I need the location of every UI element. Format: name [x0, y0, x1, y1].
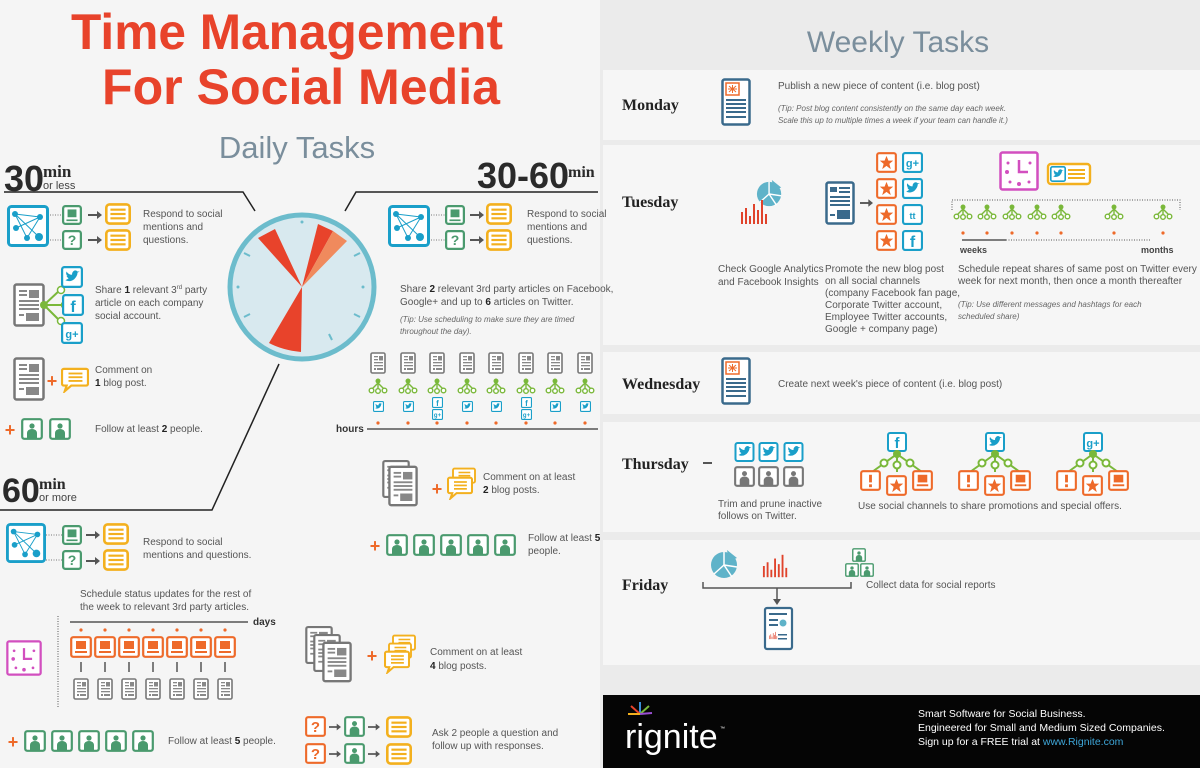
row: tuesday: (company Facebook fan page,	[825, 288, 960, 299]
item: ask 2 people: ?	[311, 719, 320, 736]
item: respond 60	[7, 524, 251, 570]
row: monday: (Tip: Post blog content consistently on the same day each week.	[778, 104, 1006, 113]
row: tuesday: f	[910, 234, 916, 251]
item: share 2 articles: Google+ and up to 6 articles on Twitter.	[400, 297, 574, 308]
item: share 1 article: article on each company	[95, 298, 203, 309]
row: tuesday: Schedule repeat shares of same post on Twitter every	[958, 264, 1197, 275]
item: comment on 2 blog posts: Comment on at least	[483, 472, 575, 483]
item: follow 5 (60)	[8, 731, 276, 752]
item: respond 30-60: Respond to social	[527, 209, 606, 220]
item: respond 30-60: questions.	[527, 235, 573, 246]
title	[71, 4, 503, 115]
chart: hourly timeline: g+	[523, 413, 531, 419]
row: thursday: Trim and prune inactive	[718, 499, 823, 510]
row: tuesday: g+	[906, 158, 919, 170]
background right	[600, 0, 1200, 768]
chart: scheduled status updates days	[7, 589, 276, 707]
row: wednesday: Create next week's piece of content (i.e. blog post)	[778, 379, 1002, 390]
header: 30 min or less: min	[43, 162, 72, 181]
row: thursday: Thursday	[622, 456, 689, 473]
item: follow 2: +	[5, 420, 15, 440]
item: share 1 article: party	[182, 285, 207, 296]
item: follow 2	[5, 419, 203, 440]
header: 60 min or more: or more	[39, 492, 77, 504]
item: comment on 2 blog posts: 2 blog posts.	[483, 485, 540, 496]
row: monday: Monday	[622, 97, 679, 114]
clock	[230, 215, 374, 359]
item: comment on 4 blog posts: Comment on at least	[430, 647, 522, 658]
row: tuesday: months	[1141, 245, 1174, 255]
footer: rignite	[603, 695, 1200, 768]
row: tuesday: weeks	[959, 245, 987, 255]
row: tuesday: and Facebook Insights	[718, 277, 819, 288]
title: Time Management	[71, 4, 503, 60]
title: For Social Media	[102, 59, 501, 115]
row: thursday: Use social channels to share promotions and special offers.	[858, 501, 1122, 512]
item: share 1 article: Share 1 relevant 3	[95, 285, 177, 296]
item: follow 5 (30-60): people.	[528, 546, 561, 557]
header: 30-60 min: 30-60	[477, 155, 569, 196]
item: share 1 article: rd	[177, 285, 182, 291]
row: friday: Friday	[622, 577, 668, 594]
item: respond 30min: questions.	[143, 235, 189, 246]
header: 30 min or less: or less	[43, 180, 76, 192]
item: comment on 2 blog posts: +	[432, 479, 442, 499]
chart: scheduled status updates days: days	[253, 617, 276, 628]
row: tuesday: Tuesday	[622, 194, 678, 211]
row: wednesday: Wednesday	[622, 376, 700, 393]
item: follow 5 (30-60)	[370, 533, 601, 557]
footer: rignite: Engineered for Small and Medium Sized Companies.	[918, 722, 1165, 734]
header: 30-60 min	[345, 155, 598, 211]
row: monday: Scale this up to multiple times a week if your team can handle it.)	[778, 116, 1008, 125]
item: share 1 article: social account.	[95, 311, 161, 322]
item: share 1 article: g+	[65, 329, 79, 341]
row: wednesday	[622, 358, 1002, 404]
header: 30 min or less	[4, 158, 255, 211]
item: ask 2 people	[306, 717, 558, 764]
item: comment on 2 blog posts	[383, 461, 575, 505]
item: comment on 4 blog posts: +	[367, 646, 377, 666]
footer: rignite: rignite	[625, 718, 718, 756]
row: tuesday: on all social channels	[825, 276, 920, 287]
header: 60 min or more: 60	[2, 472, 40, 510]
item: follow 5 (60): +	[8, 732, 18, 752]
item: ask 2 people: Ask 2 people a question and	[432, 728, 558, 739]
item: respond 30min: Respond to social	[143, 209, 222, 220]
item: respond 30min	[8, 204, 222, 250]
item: follow 5 (30-60): Follow at least 5	[528, 533, 601, 544]
row: friday	[622, 549, 996, 649]
header: 60 min or more	[0, 364, 279, 510]
row: tuesday: Employee Twitter accounts,	[825, 312, 947, 323]
item: respond 30min: mentions and	[143, 222, 203, 233]
item: comment on 4 blog posts: 4 blog posts.	[430, 661, 487, 672]
chart: hourly timeline: f	[525, 399, 528, 408]
row: friday: Collect data for social reports	[866, 580, 996, 591]
row: thursday: follows on Twitter.	[718, 511, 797, 522]
item: respond 60: Respond to social	[143, 537, 222, 548]
item: share 2 articles: throughout the day).	[400, 327, 472, 336]
item: share 2 articles: Share 2 relevant 3rd party articles on Facebook,	[400, 284, 613, 295]
item: comment on 1 blog post: +	[47, 371, 57, 391]
item: respond 30-60: mentions and	[527, 222, 587, 233]
row: monday: Publish a new piece of content (i.e. blog post)	[778, 81, 980, 92]
item: comment on 1 blog post	[14, 358, 152, 400]
chart: scheduled status updates days: the week to relevant 3rd party articles.	[80, 602, 249, 613]
footer: rignite: ™	[720, 726, 725, 732]
heading: daily tasks: Daily Tasks	[219, 130, 375, 165]
item: share 2 articles: (Tip: Use scheduling to make sure they are timed	[400, 315, 575, 324]
item: share 2 articles	[400, 284, 613, 336]
row: tuesday: Promote the new blog post	[825, 264, 944, 275]
item: comment on 1 blog post: Comment on	[95, 365, 152, 376]
header: 30 min or less: 30	[4, 158, 44, 199]
item: respond 60: mentions and questions.	[143, 550, 251, 561]
item: ask 2 people: follow up with responses.	[432, 741, 544, 752]
row: thursday: g+	[1086, 438, 1100, 450]
row: monday	[622, 80, 1008, 125]
row: tuesday: Check Google Analytics	[718, 264, 824, 275]
item: follow 5 (60): Follow at least 5 people.	[168, 736, 276, 747]
footer: rignite: Sign up for a FREE trial at www.Rignite.com	[918, 736, 1124, 748]
row: thursday	[622, 433, 1128, 522]
row: tuesday: (Tip: Use different messages and hashtags for each	[958, 300, 1142, 309]
item: respond 30-60	[390, 204, 606, 250]
item: comment on 1 blog post: 1 blog post.	[95, 378, 147, 389]
row: tuesday: tt	[910, 211, 916, 221]
row: tuesday: week for next month, then once a month thereafter	[957, 276, 1183, 287]
chart: hourly timeline: hours	[336, 424, 364, 435]
item: respond 30-60: ?	[451, 232, 459, 248]
item: share 1 article	[14, 267, 207, 343]
row: tuesday	[622, 152, 1197, 335]
row: thursday: f	[894, 435, 900, 452]
header: 30-60 min: min	[568, 164, 595, 181]
item: follow 2: Follow at least 2 people.	[95, 424, 203, 435]
row: tuesday: scheduled share)	[958, 312, 1020, 321]
chart: hourly timeline	[336, 353, 598, 435]
item: share 1 article: f	[70, 299, 76, 316]
heading: weekly tasks: Weekly Tasks	[807, 26, 989, 59]
row: tuesday: Google + company page)	[825, 324, 938, 335]
chart: scheduled status updates days: Schedule status updates for the rest of	[80, 589, 251, 600]
chart: hourly timeline: f	[436, 399, 439, 408]
item: respond 30min: ?	[68, 232, 76, 248]
item: comment on 4 blog posts	[306, 627, 522, 681]
item: ask 2 people: ?	[311, 746, 320, 763]
footer: rignite: Smart Software for Social Business.	[918, 708, 1085, 720]
item: follow 5 (30-60): +	[370, 536, 380, 556]
item: respond 60: ?	[68, 552, 76, 568]
chart: hourly timeline: g+	[434, 413, 442, 419]
row: tuesday: Corporate Twitter account,	[825, 300, 942, 311]
header: 60 min or more: min	[39, 476, 66, 493]
